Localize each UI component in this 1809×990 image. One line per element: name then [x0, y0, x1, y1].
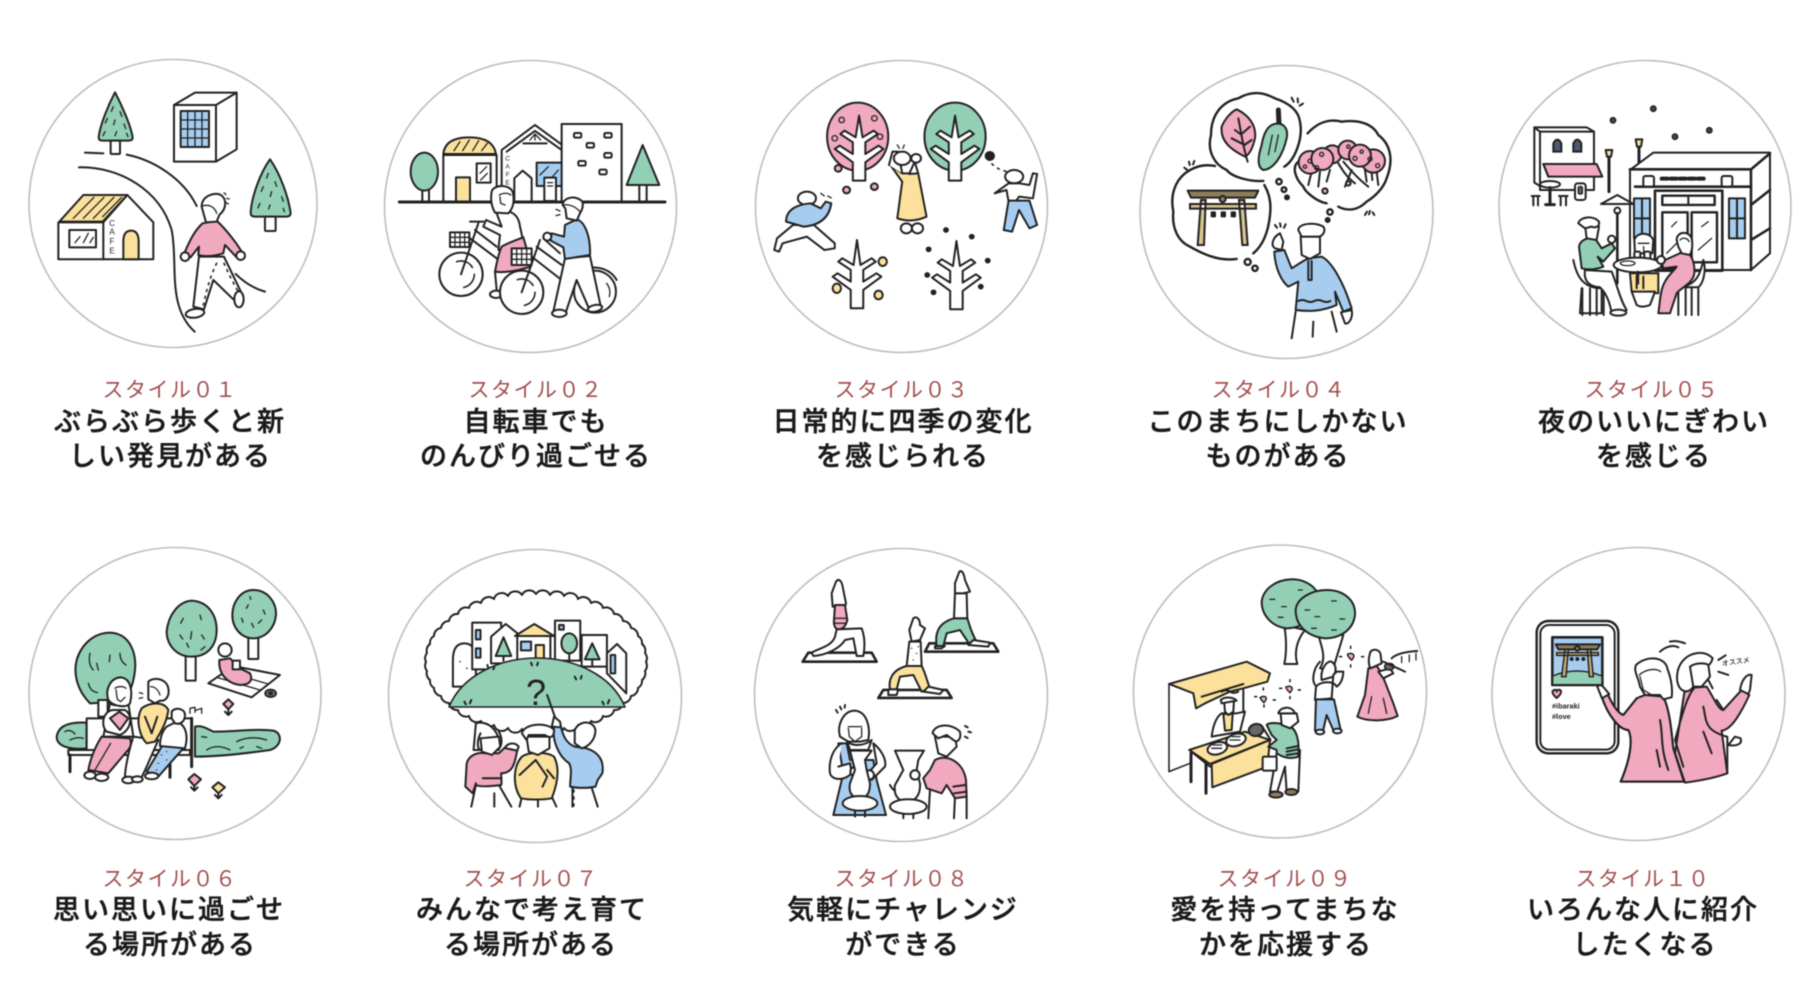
title: 夜のいいにぎわい: [1538, 407, 1770, 437]
title: ができる: [845, 930, 961, 960]
illustration: evening cafe terrace: [1499, 60, 1791, 352]
panel: style 01: [29, 60, 317, 472]
label: スタイル０１: [102, 379, 238, 402]
hashtags: #ibaraki: [1552, 702, 1580, 711]
label: スタイル０９: [1218, 868, 1352, 891]
title: しい発見がある: [69, 442, 272, 472]
potter woman: [833, 743, 886, 815]
question mark: ?: [526, 672, 546, 713]
panel: style 07: [388, 550, 682, 960]
yoga mats: [803, 653, 877, 662]
title: 日常的に四季の変化: [772, 407, 1034, 437]
panel: style 09: [1134, 545, 1426, 960]
panel: style 06: [29, 548, 321, 960]
illustration: market stall and musician: [1134, 545, 1426, 838]
title: 自転車でも: [464, 407, 608, 437]
panel: style 04: [1140, 66, 1433, 472]
title: いろんな人に紹介: [1527, 895, 1759, 925]
illustration: sharing on a smartphone: #love: [1552, 712, 1571, 721]
illustration: thought bubbles of local things: [1140, 66, 1433, 358]
potter man: [928, 790, 955, 818]
illustration: walking past a cafe: [29, 60, 317, 348]
thought cloud: [425, 590, 647, 734]
label: スタイル０６: [102, 868, 238, 891]
illustration: walking past a cafe: CAFE: [109, 219, 115, 255]
panel: style 08: [754, 548, 1048, 960]
label: スタイル０５: [1584, 379, 1720, 402]
illustration: four seasons trees: [756, 60, 1048, 352]
panel: style 05: [1499, 60, 1791, 472]
title: のんびり過ごせる: [420, 442, 652, 472]
label: スタイル０８: [834, 868, 970, 891]
title: を感じる: [1596, 442, 1712, 472]
illustration: cycling through town: [384, 60, 676, 352]
illustration: sharing on a smartphone: オススメ: [1721, 656, 1750, 668]
illustration: yoga and pottery: [754, 548, 1048, 842]
label: スタイル０３: [834, 379, 970, 402]
title: 気軽にチャレンジ: [787, 895, 1019, 925]
hill: [449, 658, 625, 707]
title: る場所がある: [83, 930, 257, 960]
title: る場所がある: [444, 930, 618, 960]
panel: style 03: [756, 60, 1048, 472]
panel: style 02: [384, 60, 676, 472]
label: スタイル０２: [468, 379, 604, 402]
label: スタイル０７: [464, 868, 598, 891]
title: 愛を持ってまちな: [1170, 895, 1400, 925]
title: かを応援する: [1199, 930, 1373, 960]
title: を感じられる: [816, 442, 990, 472]
title: このまちにしかない: [1148, 407, 1408, 437]
title: 思い思いに過ごせ: [53, 895, 285, 925]
label: スタイル０４: [1212, 379, 1346, 402]
label: スタイル１０: [1576, 868, 1710, 891]
title: したくなる: [1572, 930, 1718, 960]
illustration: sharing on a smartphone: [1492, 548, 1785, 840]
title: みんなで考え育て: [416, 895, 648, 925]
illustration: relaxing in the park: [29, 548, 321, 840]
panel: style 10: [1492, 548, 1785, 960]
illustration: cycling through town: CAFE: [505, 156, 510, 187]
illustration: imagining the town together: [388, 550, 682, 842]
title: ものがある: [1206, 442, 1350, 472]
title: ぶらぶら歩くと新: [54, 407, 286, 437]
